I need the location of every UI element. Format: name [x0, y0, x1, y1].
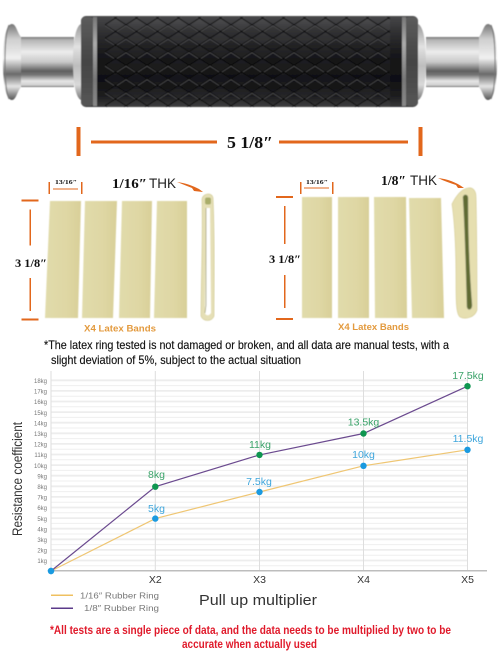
y axis tick labels: 10kg: [34, 464, 47, 470]
x axis labels: X4: [357, 574, 370, 586]
dimension: handle width 5 1/8: [76, 127, 422, 156]
height dimension 3 1/8: [15, 200, 47, 320]
note: test conditions: slight deviation of 5%, subject to the actual situation: [51, 353, 301, 367]
note: multiply by two warning: accurate when actually used: [182, 637, 317, 651]
line chart: resistance vs pull up multiplier: [10, 370, 487, 613]
series: 1/8 rubber ring: [48, 370, 484, 574]
legend: 1/8″ Rubber Ring: [84, 604, 159, 613]
series: 1/16 rubber ring: 11.5kg: [453, 433, 484, 445]
side view of thin band: [201, 194, 214, 320]
four thick latex bands: [302, 197, 444, 318]
height dimension 3 1/8: 3 1/8″: [269, 252, 301, 266]
black grip body: [81, 16, 418, 107]
left metal end: [3, 24, 81, 100]
x axis title: Pull up multiplier: [199, 593, 317, 609]
y axis tick labels: 15kg: [34, 411, 47, 417]
legend: 1/16″ Rubber Ring: [80, 592, 159, 600]
note: test conditions: *The latex ring tested is not damaged or broken, and all data are manual tests, with a: [44, 338, 449, 352]
series: 1/8 rubber ring: 8kg: [148, 469, 165, 481]
legend: [51, 592, 159, 613]
x axis labels: X5: [461, 574, 474, 586]
width dimension 13/16: [300, 179, 334, 194]
y axis tick labels: 1kg: [37, 559, 47, 565]
y axis tick labels: 3kg: [37, 538, 47, 544]
series: 1/16 rubber ring: 5kg: [148, 503, 165, 515]
note: test conditions: [44, 338, 449, 367]
y axis tick labels: 12kg: [34, 443, 47, 449]
thickness label 1/16 THK: 1/16″: [112, 177, 147, 192]
width dimension 13/16: [48, 179, 82, 194]
x axis labels: X2: [149, 574, 162, 586]
chart grid: [51, 371, 468, 571]
series: 1/8 rubber ring: 11kg: [249, 439, 271, 451]
thickness label 1/16 THK: THK: [149, 176, 176, 191]
y axis tick labels: 16kg: [34, 400, 47, 406]
panel: thick latex bands: [269, 173, 477, 332]
thickness label 1/8 THK: THK: [410, 173, 437, 188]
y axis tick labels: 6kg: [37, 506, 47, 512]
height dimension 3 1/8: [269, 196, 301, 320]
x axis line: [50, 570, 487, 572]
thickness label 1/16 THK: [112, 176, 203, 192]
width dimension 13/16: 13/16″: [306, 179, 328, 186]
series: 1/16 rubber ring: 7.5kg: [246, 476, 272, 488]
y axis tick labels: 13kg: [34, 432, 47, 438]
thickness label 1/8 THK: [381, 173, 464, 189]
y axis tick labels: 17kg: [34, 390, 47, 396]
dimension: handle width 5 1/8: 5 1/8″: [227, 133, 273, 152]
series: 1/16 rubber ring: 10kg: [352, 449, 375, 461]
y axis tick labels: [34, 379, 47, 565]
x axis labels: X3: [253, 574, 266, 586]
panel: thin latex bands: [15, 176, 214, 334]
y axis tick labels: 5kg: [37, 517, 47, 523]
product photo: handle: [3, 16, 497, 107]
y axis tick labels: 4kg: [37, 527, 47, 533]
x axis labels: [149, 574, 474, 586]
y axis title: Resistance coefficient: [10, 422, 25, 536]
caption: X4 latex bands: X4 Latex Bands: [338, 322, 409, 332]
thickness label 1/8 THK: 1/8″: [381, 174, 406, 189]
side view of thick band: [452, 188, 477, 318]
y axis tick labels: 18kg: [34, 379, 47, 385]
note: multiply by two warning: [50, 623, 451, 651]
y axis tick labels: 14kg: [34, 421, 47, 427]
series: 1/8 rubber ring: 17.5kg: [452, 370, 484, 382]
height dimension 3 1/8: 3 1/8″: [15, 256, 47, 270]
right metal end: [418, 24, 497, 100]
series: 1/8 rubber ring: 13.5kg: [348, 416, 379, 428]
y axis tick labels: 11kg: [34, 453, 47, 459]
y axis tick labels: 9kg: [37, 474, 47, 480]
y axis tick labels: 2kg: [37, 549, 47, 555]
series: 1/16 rubber ring: [48, 433, 484, 574]
width dimension 13/16: 13/16″: [55, 179, 77, 186]
caption: X4 latex bands: X4 Latex Bands: [84, 324, 156, 334]
four thin latex bands: [45, 201, 187, 318]
y axis tick labels: 7kg: [37, 496, 47, 502]
y axis tick labels: 8kg: [37, 485, 47, 491]
